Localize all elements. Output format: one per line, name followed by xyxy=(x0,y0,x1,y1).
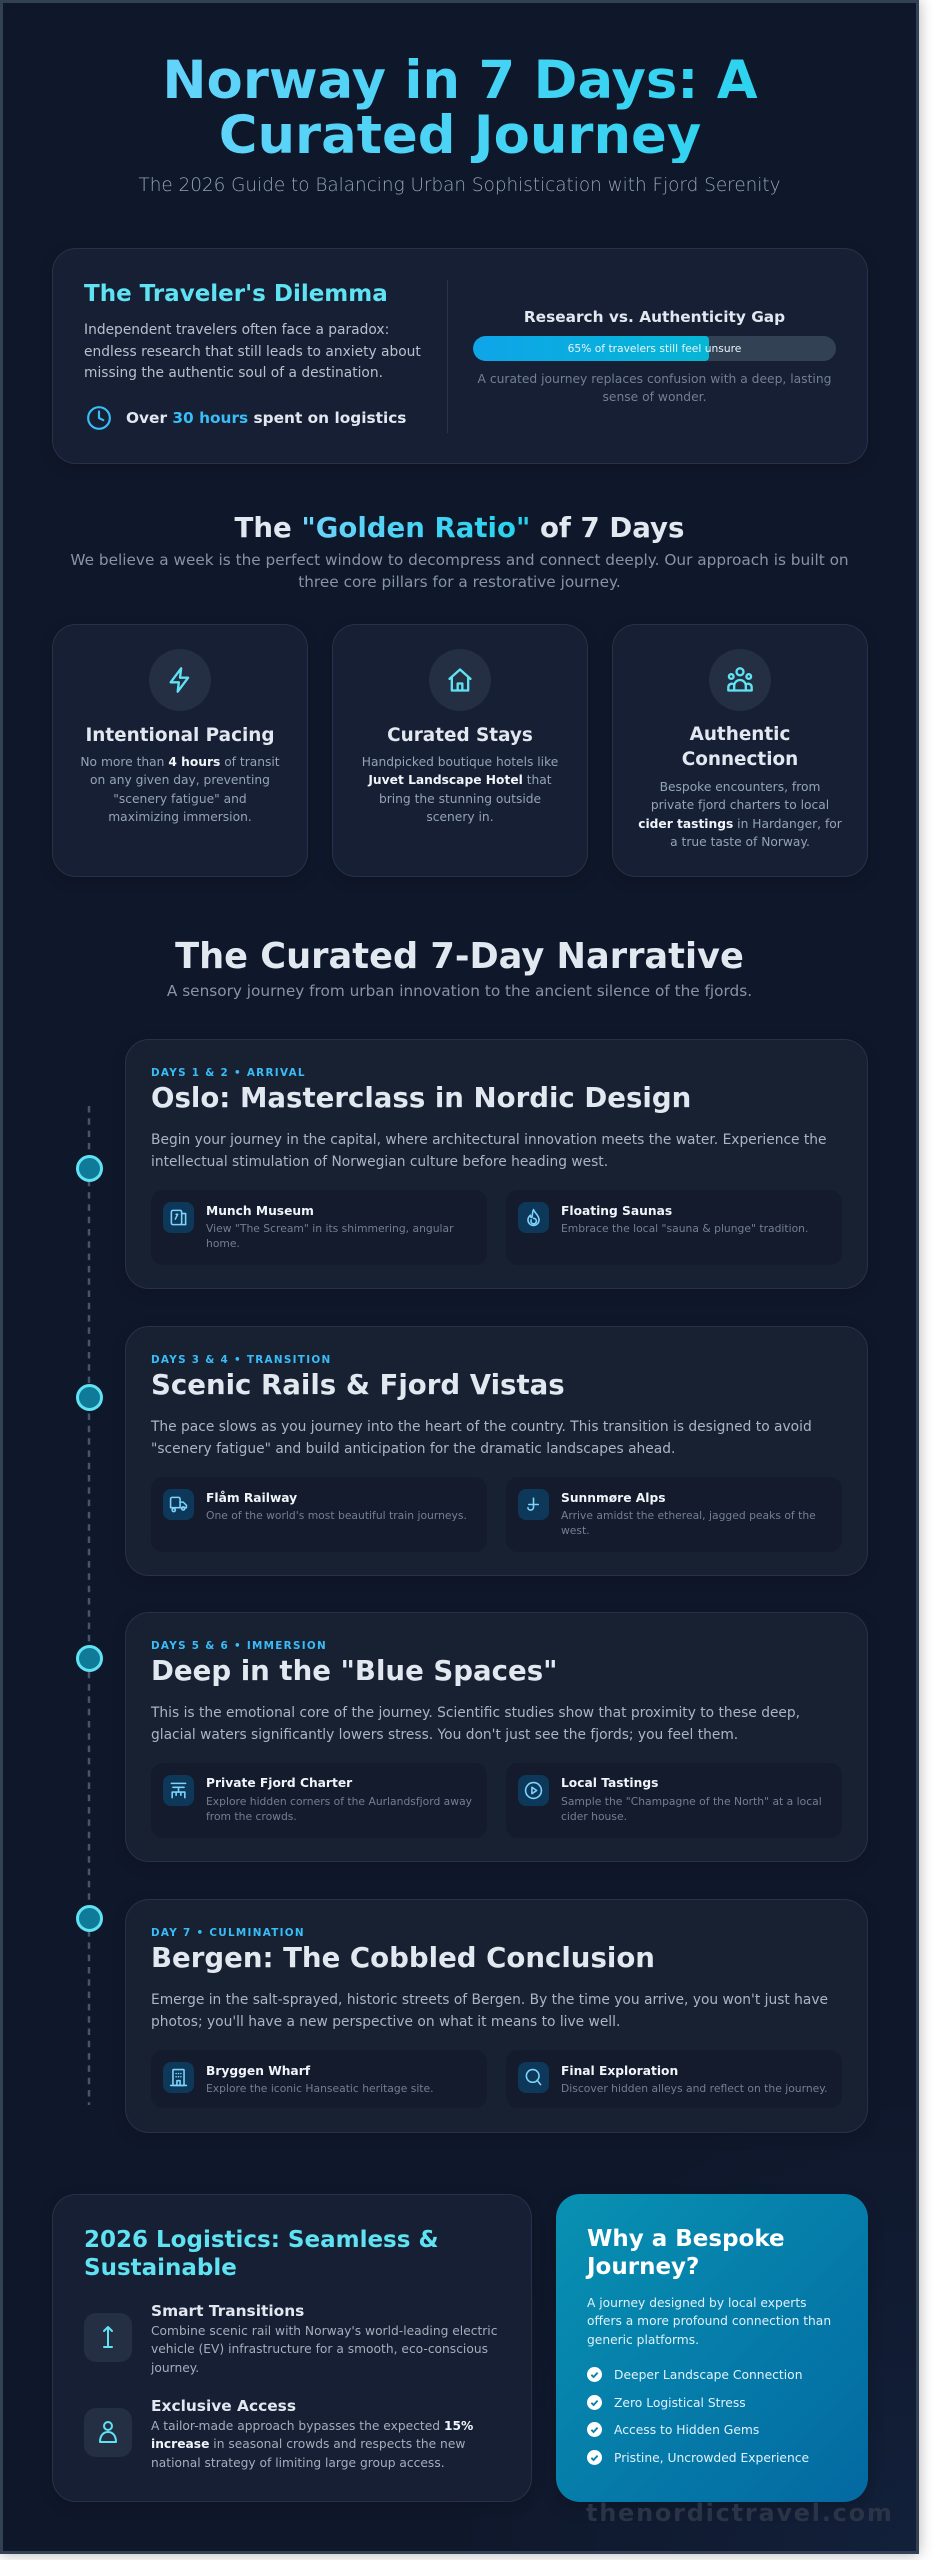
stop text: Emerge in the salt-sprayed, historic streets of Bergen. By the time you arrive, you won't just have xyxy=(151,1992,828,2008)
item text: journey. xyxy=(151,2361,199,2375)
stop text: "scenery fatigue" and build anticipation for the dramatic landscapes ahead. xyxy=(151,1441,675,1457)
pillar text: Handpicked boutique hotels like xyxy=(362,755,558,769)
text: golden ratio intro: three core pillars for a restorative journey. xyxy=(298,573,621,591)
timeline dot: day 7 xyxy=(76,1905,102,1932)
pillar text: private fjord charters to local xyxy=(651,798,829,812)
highlight text: Arrive amidst the ethereal, jagged peaks of the xyxy=(561,1509,816,1522)
panel: the traveler's dilemma xyxy=(52,248,868,464)
highlight: Bryggen Wharf xyxy=(151,2050,487,2108)
pillar text: on any given day, preventing xyxy=(90,773,270,787)
timeline line xyxy=(88,1106,90,2105)
text: dilemma description: Independent travelers often face a paradox: xyxy=(84,322,389,338)
highlight: Flam Railway xyxy=(151,1477,487,1552)
highlight text: Sample the "Champagne of the North" at a local xyxy=(561,1795,822,1808)
pillar text xyxy=(80,755,280,824)
highlight title: Flåm Railway xyxy=(206,1491,297,1505)
stop text xyxy=(150,1705,800,1743)
benefit text: Deeper Landscape Connection xyxy=(614,2368,802,2382)
highlight text: Embrace the local "sauna & plunge" tradition. xyxy=(561,1222,808,1235)
icon: building xyxy=(163,2062,194,2093)
item text: increase in seasonal crowds and respects the new xyxy=(151,2437,465,2451)
pillar text: scenery in. xyxy=(426,810,494,824)
icon: group of people xyxy=(709,649,771,711)
pillar text: cider tastings in Hardanger, for xyxy=(638,817,842,831)
progress bar chart xyxy=(473,336,836,361)
pillar title: Connection xyxy=(682,749,798,770)
heading: logistics xyxy=(84,2227,439,2281)
highlight title: Private Fjord Charter xyxy=(206,1776,352,1790)
stop text: Begin your journey in the capital, where architectural innovation meets the water. Experience the xyxy=(151,1132,827,1148)
text: golden ratio intro: We believe a week is the perfect window to decompress and connect deeply. Our approach is built on xyxy=(70,551,849,569)
day label: DAYS 3 & 4 • TRANSITION xyxy=(151,1354,332,1366)
panel: Oslo xyxy=(125,1039,868,1289)
pillar text: No more than 4 hours of transit xyxy=(80,755,280,769)
icon: museum xyxy=(163,1202,194,1233)
icon: check xyxy=(587,2422,602,2437)
highlight title: Sunnmøre Alps xyxy=(561,1491,666,1505)
icon: flame xyxy=(518,1202,549,1233)
pillar text: Bespoke encounters, from xyxy=(660,780,820,794)
title xyxy=(52,53,868,163)
pillar text: a true taste of Norway. xyxy=(670,835,810,849)
text: chart caption: A curated journey replaces confusion with a deep, lasting xyxy=(478,372,831,386)
stat: hours on logistics: Over 30 hours spent on logistics xyxy=(126,409,406,427)
highlight text: View "The Scream" in its shimmering, angular xyxy=(206,1222,454,1235)
timeline dot: days 1 and 2 xyxy=(76,1155,102,1182)
bar label: 65% of travelers still feel unsure xyxy=(568,342,741,355)
item text: national strategy of limiting large group access. xyxy=(151,2456,445,2470)
icon: play circle xyxy=(518,1775,549,1806)
text: chart caption: sense of wonder. xyxy=(602,390,706,404)
highlight text xyxy=(561,1795,822,1823)
text: dilemma description xyxy=(84,322,421,381)
highlight title: Munch Museum xyxy=(206,1204,314,1218)
pillar text xyxy=(638,780,842,849)
icon: mountain path xyxy=(518,1489,549,1520)
heading: bespoke xyxy=(586,2226,785,2280)
bar fill: 65 percent xyxy=(473,336,709,361)
highlight title: Final Exploration xyxy=(561,2064,678,2078)
highlight text xyxy=(206,1222,454,1250)
stop title: Bergen: The Cobbled Conclusion xyxy=(151,1941,655,1974)
pillar text: bring the stunning outside xyxy=(379,792,541,806)
panel: Scenic Rails xyxy=(125,1326,868,1576)
item text xyxy=(151,2419,473,2470)
highlight text: Explore the iconic Hanseatic heritage site. xyxy=(206,2082,434,2095)
stop text xyxy=(150,1419,812,1457)
highlight text: Explore hidden corners of the Aurlandsfjord away xyxy=(206,1795,472,1808)
pillar title: Curated Stays xyxy=(387,725,533,746)
highlight text: cider house. xyxy=(561,1810,627,1823)
highlight text xyxy=(561,1509,816,1537)
icon: arrow up xyxy=(84,2313,132,2362)
heading: bespoke: Why a Bespoke xyxy=(587,2226,785,2252)
panel: intentional pacing xyxy=(52,624,308,877)
heading: golden ratio: The "Golden Ratio" of 7 Days xyxy=(235,511,684,544)
highlight text: from the crowds. xyxy=(206,1810,297,1823)
heading: dilemma: The Traveler's Dilemma xyxy=(84,281,388,307)
heading: curated narrative: The Curated 7-Day Narrative xyxy=(175,936,744,977)
benefit text: Access to Hidden Gems xyxy=(614,2423,759,2437)
highlight: Munch Museum xyxy=(151,1190,487,1265)
benefit text: Pristine, Uncrowded Experience xyxy=(614,2451,809,2465)
pillar text xyxy=(362,755,558,824)
icon: house xyxy=(429,649,491,711)
stop text: photos; you'll have a new perspective on what it means to live well. xyxy=(151,2014,620,2030)
highlight text xyxy=(206,1795,472,1823)
pillar text: maximizing immersion. xyxy=(108,810,252,824)
panel: why a bespoke journey xyxy=(556,2194,868,2502)
panel: 2026 logistics xyxy=(52,2194,532,2502)
item text: vehicle (EV) infrastructure for a smooth, eco-conscious xyxy=(151,2342,488,2356)
highlight text: west. xyxy=(561,1524,590,1537)
stop text: intellectual stimulation of Norwegian culture before heading west. xyxy=(151,1154,608,1170)
text: narrative intro: A sensory journey from urban innovation to the ancient silence of the fjords. xyxy=(167,982,752,1000)
watermark: thenordictravel.com xyxy=(586,2499,894,2527)
icon: train xyxy=(163,1489,194,1520)
item title: Smart Transitions xyxy=(151,2302,304,2320)
highlight: Final Exploration xyxy=(506,2050,842,2108)
benefit text: Zero Logistical Stress xyxy=(614,2396,746,2410)
text: dilemma description: missing the authentic soul of a destination. xyxy=(84,365,383,381)
icon: charter boat xyxy=(163,1775,194,1806)
panel: curated stays xyxy=(332,624,588,877)
icon: check xyxy=(587,2395,602,2410)
panel: Bergen xyxy=(125,1899,868,2133)
icon: lightning bolt xyxy=(149,649,211,711)
highlight title: Bryggen Wharf xyxy=(206,2064,310,2078)
pillar title xyxy=(682,724,798,770)
stop text: This is the emotional core of the journey. Scientific studies show that proximity to these deep, xyxy=(151,1705,800,1721)
pillar text: Juvet Landscape Hotel that xyxy=(368,773,552,787)
timeline dot: days 5 and 6 xyxy=(76,1645,102,1672)
icon: check xyxy=(587,2367,602,2382)
pillar title: Authentic xyxy=(690,724,790,745)
panel: Blue Spaces xyxy=(125,1612,868,1862)
title: Curated Journey xyxy=(219,105,701,166)
text: bespoke description: generic platforms. xyxy=(587,2333,699,2347)
item text: Combine scenic rail with Norway's world-leading electric xyxy=(151,2324,497,2338)
highlight title: Local Tastings xyxy=(561,1776,658,1790)
subtitle: The 2026 Guide to Balancing Urban Sophistication with Fjord Serenity xyxy=(138,175,781,196)
title: Norway in 7 Days: A xyxy=(162,50,758,111)
day label: DAYS 1 & 2 • ARRIVAL xyxy=(151,1067,306,1079)
text: bespoke description: offers a more profound connection than xyxy=(587,2314,831,2328)
text: bespoke description xyxy=(587,2296,831,2347)
highlight: Local Tastings xyxy=(506,1763,842,1838)
icon: person xyxy=(84,2408,132,2457)
timeline dot: days 3 and 4 xyxy=(76,1384,102,1411)
panel: authentic connection xyxy=(612,624,868,877)
stop text: The pace slows as you journey into the heart of the country. This transition is designed to avoid xyxy=(151,1419,812,1435)
pillar title: Intentional Pacing xyxy=(85,725,275,746)
highlight title: Floating Saunas xyxy=(561,1204,672,1218)
day label: DAYS 5 & 6 • IMMERSION xyxy=(151,1640,327,1652)
heading: logistics: Sustainable xyxy=(84,2255,237,2281)
heading: logistics: 2026 Logistics: Seamless & xyxy=(84,2227,439,2253)
pillar text: "scenery fatigue" and xyxy=(113,792,247,806)
stop title: Oslo: Masterclass in Nordic Design xyxy=(151,1081,691,1114)
stop title: Scenic Rails & Fjord Vistas xyxy=(151,1368,565,1401)
text: bespoke description: A journey designed by local experts xyxy=(587,2296,807,2310)
text: chart caption xyxy=(478,372,831,404)
heading: gap chart: Research vs. Authenticity Gap xyxy=(524,308,785,326)
day label: DAY 7 • CULMINATION xyxy=(151,1927,305,1939)
highlight: Private Fjord Charter xyxy=(151,1763,487,1838)
item text xyxy=(150,2324,497,2375)
stop text xyxy=(151,1992,828,2030)
icon: check xyxy=(587,2450,602,2465)
highlight text: One of the world's most beautiful train journeys. xyxy=(206,1509,467,1522)
text: golden ratio intro xyxy=(70,551,849,591)
divider xyxy=(447,280,448,433)
stop text xyxy=(151,1132,827,1170)
stop text: glacial waters significantly lowers stress. You don't just see the fjords; you feel them. xyxy=(151,1727,738,1743)
highlight text: home. xyxy=(206,1237,240,1250)
item text: A tailor-made approach bypasses the expected 15% xyxy=(151,2419,473,2433)
icon: clock xyxy=(87,406,111,430)
stop title: Deep in the "Blue Spaces" xyxy=(151,1654,558,1687)
item title: Exclusive Access xyxy=(151,2397,296,2415)
highlight: Floating Saunas xyxy=(506,1190,842,1265)
icon: magnifier xyxy=(518,2062,549,2093)
highlight text: Discover hidden alleys and reflect on the journey. xyxy=(561,2082,828,2095)
heading: bespoke: Journey? xyxy=(587,2254,699,2280)
text: dilemma description: endless research that still leads to anxiety about xyxy=(84,344,421,360)
highlight: Sunnmore Alps xyxy=(506,1477,842,1552)
benefit checklist xyxy=(587,2367,809,2465)
